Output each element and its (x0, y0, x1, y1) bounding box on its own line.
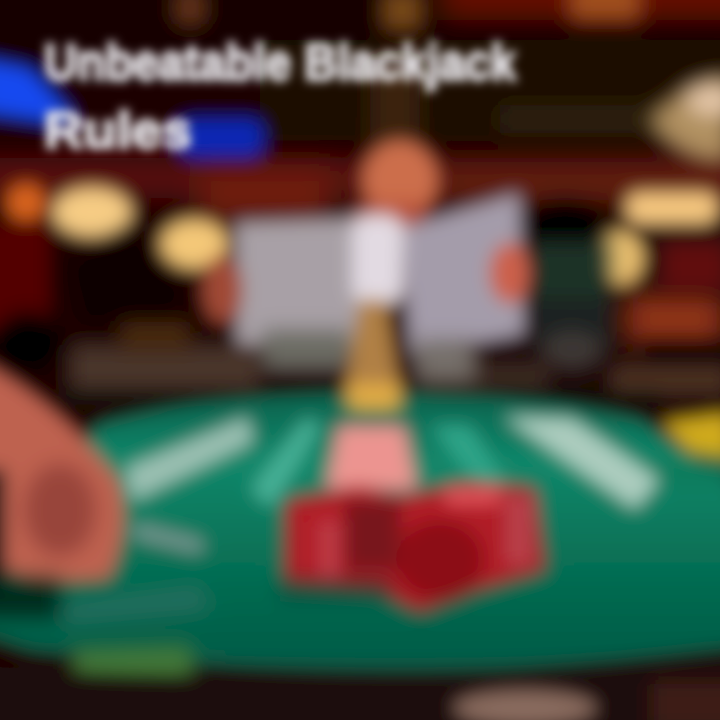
dealer figure (202, 140, 530, 380)
background lights and patrons (0, 183, 720, 402)
gold trophy centerpiece (325, 300, 418, 490)
title (44, 34, 516, 160)
title: Rules (44, 102, 192, 160)
title: Unbeatable Blackjack (44, 34, 516, 92)
player hand in foreground (0, 362, 206, 618)
green felt table (0, 392, 720, 670)
table edge (0, 645, 720, 720)
table betting markings (55, 416, 660, 696)
blue light accent (0, 58, 264, 158)
red dice stack (280, 482, 545, 612)
